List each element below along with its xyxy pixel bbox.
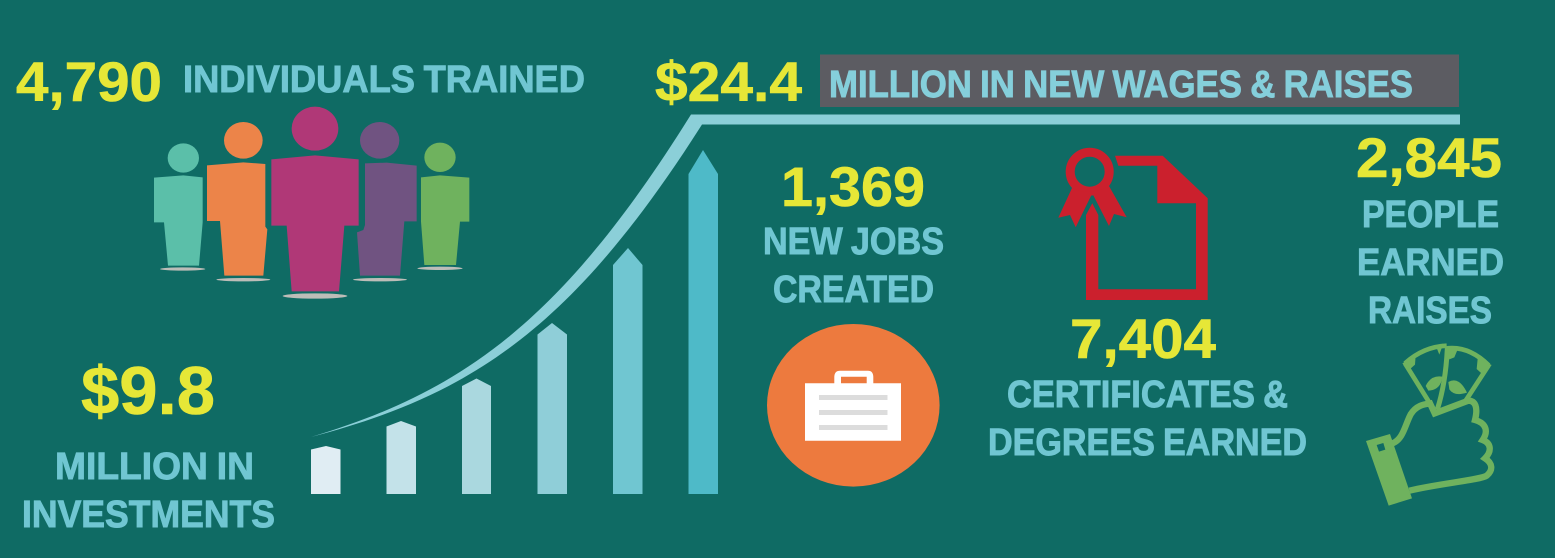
stat: new wages and raises: $24.4 — [655, 50, 802, 113]
icon: briefcase in orange circle — [767, 324, 940, 487]
stat: new jobs created: NEW JOBS — [763, 221, 944, 263]
stat: new wages and raises: MILLION IN NEW WAGES & RAISES — [829, 64, 1413, 106]
stat: individuals trained: 4,790 — [16, 50, 162, 113]
icon: certificate document — [1058, 152, 1208, 300]
stat: certificates and degrees: DEGREES EARNED — [988, 422, 1307, 464]
stat: new jobs created: 1,369 — [781, 155, 925, 218]
icon: group of people — [154, 107, 469, 299]
stat: investments: INVESTMENTS — [22, 494, 275, 536]
growth curve — [311, 114, 1460, 437]
stat: people earned raises: PEOPLE — [1362, 194, 1499, 236]
stat: investments: MILLION IN — [55, 446, 254, 488]
stat: people earned raises — [1356, 126, 1504, 332]
stat: investments — [22, 353, 275, 536]
stat: new wages and raises — [655, 50, 1459, 113]
stat: new jobs created: CREATED — [773, 269, 934, 311]
stat: new jobs created — [763, 155, 944, 311]
bar chart: rising arrows — [311, 150, 718, 494]
stat: certificates and degrees: CERTIFICATES & — [1007, 374, 1288, 416]
stat: people earned raises: RAISES — [1368, 290, 1492, 332]
stat: certificates and degrees: 7,404 — [1070, 307, 1216, 370]
stat: people earned raises: 2,845 — [1356, 126, 1502, 189]
stat: people earned raises: EARNED — [1357, 242, 1504, 284]
stat: certificates and degrees — [988, 307, 1307, 464]
icon: hand holding money — [1366, 344, 1492, 506]
stat: individuals trained: INDIVIDUALS TRAINED — [183, 59, 585, 101]
stat: investments: $9.8 — [81, 353, 215, 429]
stat: individuals trained — [16, 50, 585, 113]
